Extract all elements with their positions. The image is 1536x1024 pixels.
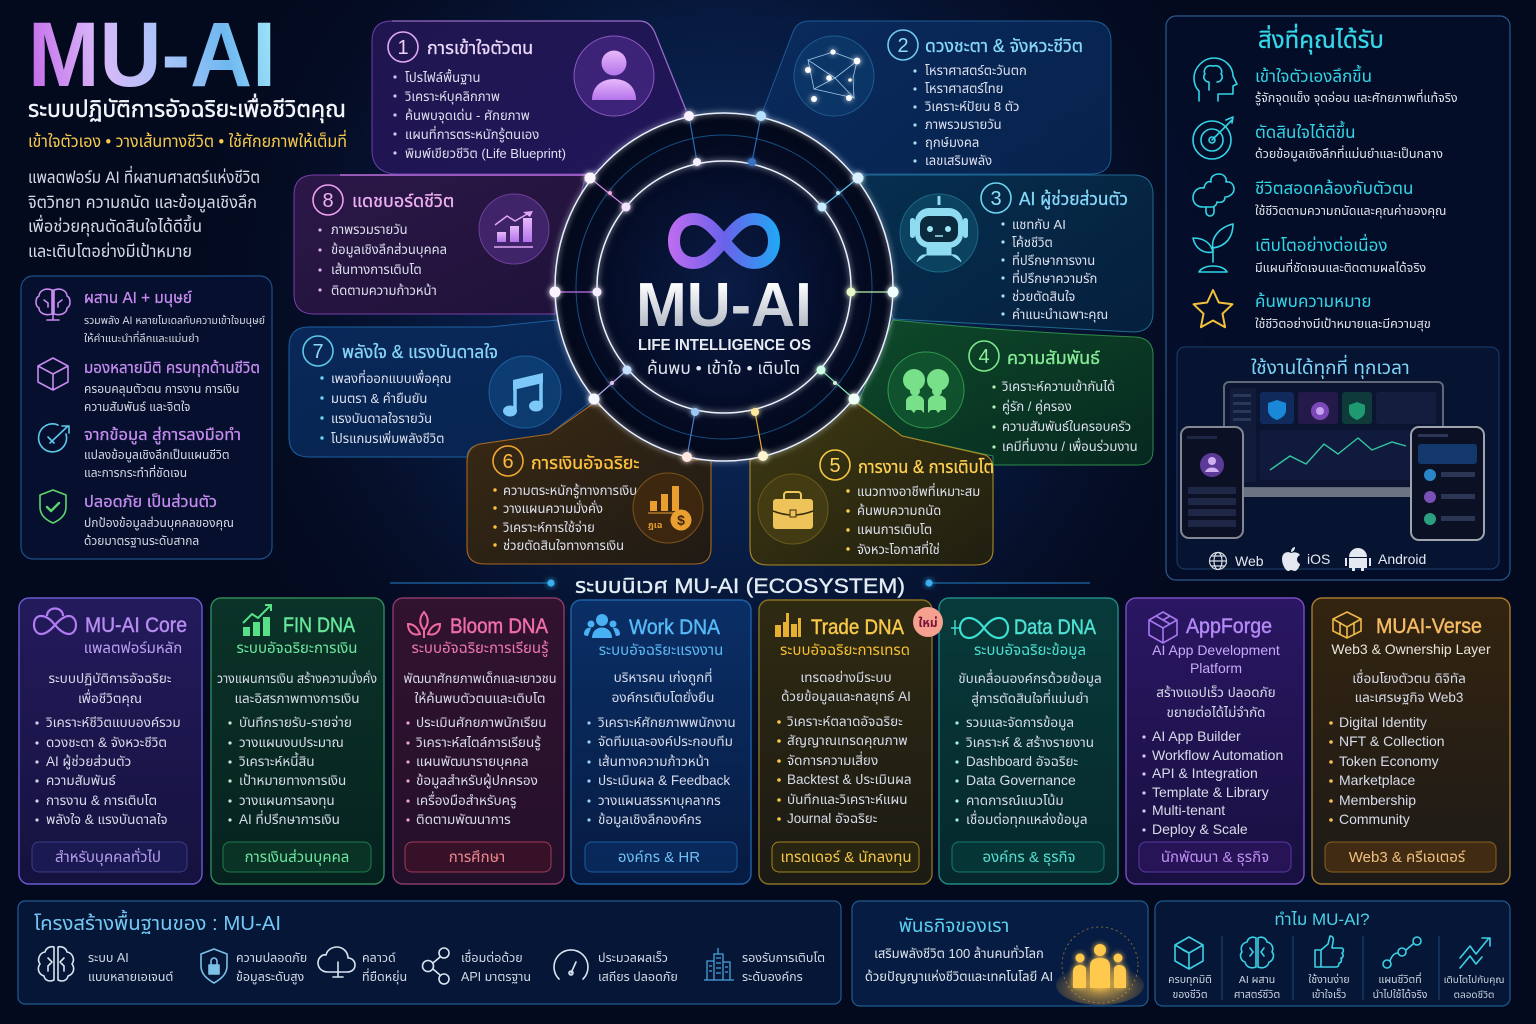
panel 2: destiny and life rhythm: ดวงชะตา & จังหวะชีวิต xyxy=(925,36,1083,56)
card: Trade DNA: จัดการความเสี่ยง xyxy=(787,751,878,768)
card: Data DNA: องค์กร & ธุรกิจ xyxy=(982,849,1076,866)
card: Work DNA: วางแผนสรรหาบุคลากร xyxy=(598,793,721,809)
feature: data to action: จากข้อมูล สู่การลงมือทำ xyxy=(84,426,241,444)
icon: team xyxy=(584,614,620,638)
panel 7: motivation and inspiration xyxy=(289,320,594,457)
card: Trade DNA: วิเคราะห์ตลาดอัจฉริยะ xyxy=(787,714,903,729)
panel: why MU-AI xyxy=(1155,901,1510,1006)
card: FIN DNA xyxy=(211,598,384,884)
icon: app cube xyxy=(1149,612,1177,643)
item: gauge: เสถียร ปลอดภัย xyxy=(598,970,678,984)
intro paragraph: และเติบโตอย่างมีเป้าหมาย xyxy=(28,242,192,261)
feature: secure and private: ปกป้องข้อมูลส่วนบุคคลของคุณ xyxy=(84,516,234,530)
panel 5: career and growth: การงาน & การเติบโต xyxy=(858,457,994,477)
benefit: life alignment: ใช้ชีวิตตามความถนัดและคุณค่าของคุณ xyxy=(1255,204,1446,218)
panel 3: personal AI assistant: โค้ชชีวิต xyxy=(1012,235,1053,250)
intro paragraph: จิตวิทยา ความถนัด และข้อมูลเชิงลึก xyxy=(28,192,257,214)
reason: AI and life science: AI ผสาน xyxy=(1239,974,1275,986)
panel: mission: พันธกิจของเรา xyxy=(899,916,1009,937)
benefit: life alignment: ชีวิตสอดคล้องกับตัวตน xyxy=(1255,178,1413,198)
panel 2: destiny and life rhythm: โหราศาสตร์ตะวันตก xyxy=(925,63,1027,78)
card: FIN DNA: วางแผนการลงทุน xyxy=(239,793,335,809)
card: Work DNA: ระบบอัจฉริยะแรงงาน xyxy=(599,642,723,659)
feature: secure and private xyxy=(40,490,234,548)
feature: AI plus human: รวมพลัง AI หลายโมเดลกับความเข้าใจมนุษย์ xyxy=(84,315,265,327)
panel 1: self understanding: โปรไฟล์พื้นฐาน xyxy=(405,68,480,85)
panel 3: personal AI assistant: AI ผู้ช่วยส่วนตัว xyxy=(1019,189,1128,211)
panel 3: personal AI assistant: ที่ปรึกษาความรัก xyxy=(1012,269,1097,286)
platform: android: Android xyxy=(1378,551,1426,567)
feature: multi-dimensional: ความสัมพันธ์ และจิตใจ xyxy=(84,400,190,414)
item: security: ข้อมูลระดับสูง xyxy=(236,970,305,984)
card: Work DNA: ข้อมูลเชิงลึกองค์กร xyxy=(598,812,702,828)
panel: infrastructure: โครงสร้างพื้นฐานของ : MU-AI xyxy=(34,909,281,935)
card: Work DNA: บริหารคน เก่งถูกที่ xyxy=(614,668,712,686)
item: security xyxy=(201,949,307,984)
platform: web xyxy=(1210,552,1264,570)
reason: all dimensions xyxy=(1168,937,1212,1001)
card: AppForge: สร้างแอปเร็ว ปลอดภัย xyxy=(1156,685,1276,700)
reason: easy to use xyxy=(1308,936,1350,1001)
panel 4: relationships: 4 xyxy=(978,346,990,368)
card: FIN DNA: วิเคราะห์หนี้สิน xyxy=(239,752,315,769)
card: MU-AI Core: AI ผู้ช่วยส่วนตัว xyxy=(46,753,131,770)
item: cloud: คลาวด์ xyxy=(362,951,396,965)
hub subtitle: LIFE INTELLIGENCE OS xyxy=(638,337,811,354)
logo wordmark: MU-AI xyxy=(28,4,276,106)
reason: all dimensions: ของชีวิต xyxy=(1172,989,1208,1001)
card: FIN DNA: FIN DNA xyxy=(283,614,355,637)
feature: AI plus human: ให้คำแนะนำที่ลึกและแม่นยำ xyxy=(84,330,199,345)
card: MU-AI Core xyxy=(19,598,202,884)
item: gauge: ประมวลผลเร็ว xyxy=(598,951,668,965)
card: MUAI-Verse: เชื่อมโยงตัวตน ดิจิทัล xyxy=(1352,669,1466,686)
icon: two people with hearts xyxy=(888,352,964,428)
panel 7: motivation and inspiration: เพลงที่ออกแบบเพื่อคุณ xyxy=(331,369,452,386)
icon: cloud infinity xyxy=(34,608,76,634)
card: MU-AI Core: การงาน & การเติบโต xyxy=(46,793,157,808)
reason: easy to use: เข้าใจเร็ว xyxy=(1312,988,1346,1001)
panel 8: life dashboard: 8 xyxy=(322,190,334,212)
reason: all dimensions: ครบทุกมิติ xyxy=(1168,974,1212,986)
card: Bloom DNA: วิเคราะห์สไตล์การเรียนรู้ xyxy=(416,735,541,751)
panel 7: motivation and inspiration: แรงบันดาลใจรายวัน xyxy=(331,411,432,426)
panel 2: destiny and life rhythm: 2 xyxy=(897,35,909,57)
panel 8: life dashboard: เส้นทางการเติบโต xyxy=(331,262,422,277)
infinity logo xyxy=(674,219,774,263)
panel 8: life dashboard: แดชบอร์ดชีวิต xyxy=(352,191,454,211)
card: Data DNA: เชื่อมต่อทุกแหล่งข้อมูล xyxy=(966,810,1088,828)
card: AppForge: Multi-tenant xyxy=(1152,802,1225,818)
benefit: continuous growth: เติบโตอย่างต่อเนื่อง xyxy=(1255,233,1387,255)
feature: secure and private: ด้วยมาตรฐานระดับสากล xyxy=(84,534,199,548)
panel 2: destiny and life rhythm: ภาพรวมรายวัน xyxy=(925,117,1002,132)
item: enterprise building: ระดับองค์กร xyxy=(742,970,803,984)
icon: coin and bars: $ xyxy=(677,512,685,528)
hub title: MU-AI xyxy=(636,271,812,340)
card: FIN DNA: วางแผนงบประมาณ xyxy=(239,735,344,750)
panel 7: motivation and inspiration: โปรแกมรเพิ่มพลังชีวิต xyxy=(331,430,444,446)
reason: easy to use: ใช้งานง่าย xyxy=(1308,973,1350,986)
card: AppForge: Template & Library xyxy=(1152,784,1269,800)
tagline: เข้าใจตัวเอง • วางเส้นทางชีวิต • ใช้ศักยภาพให้เต็มที่ xyxy=(28,129,347,151)
central hub xyxy=(550,111,898,462)
card: Data DNA: ระบบอัจฉริยะข้อมูล xyxy=(974,642,1086,659)
card: FIN DNA: วางแผนการเงิน สร้างความมั่งคั่ง xyxy=(217,670,377,686)
item: enterprise building: รองรับการเติบโต xyxy=(742,951,825,965)
panel 8: life dashboard: ภาพรวมรายวัน xyxy=(331,222,408,237)
reason: growing with you: เติบโตไปกับคุณ xyxy=(1444,974,1504,986)
card: FIN DNA: เป้าหมายทางการเงิน xyxy=(239,773,346,788)
panel 6: smart finance: วางแผนความมั่งคั่ง xyxy=(503,500,603,516)
feature: data to action: แปลงข้อมูลเชิงลึกเป็นแผนชีวิต xyxy=(84,448,230,462)
card: AppForge: Deploy & Scale xyxy=(1152,821,1248,837)
benefit: better decisions: ด้วยข้อมูลเชิงลึกที่แม่นยำและเป็นกลาง xyxy=(1255,145,1443,161)
panel 1: self understanding: 1 xyxy=(397,37,409,59)
panel: devices: ใช้งานได้ทุกที่ ทุกเวลา xyxy=(1251,354,1410,379)
panel: infrastructure xyxy=(18,901,841,1004)
benefit: know yourself xyxy=(1194,58,1458,105)
card: Bloom DNA: ประเมินศักยภาพนักเรียน xyxy=(416,715,547,730)
reason: practical life plan: นำไปใช้ได้จริง xyxy=(1373,989,1428,1001)
intro paragraph: เพื่อช่วยคุณตัดสินใจได้ดีขึ้น xyxy=(28,214,202,237)
panel 2: destiny and life rhythm xyxy=(761,21,1111,174)
panel 5: career and growth: 5 xyxy=(829,455,841,477)
item: multi-agent AI: แบบหลายเอเจนต์ xyxy=(88,970,173,984)
card: AppForge: AppForge xyxy=(1186,615,1272,638)
reason: AI and life science xyxy=(1234,937,1280,1001)
panel 5: career and growth: ค้นพบความถนัด xyxy=(857,503,941,518)
card: MU-AI Core: วิเคราะห์ชีวิตแบบองค์รวม xyxy=(46,715,181,730)
card: AppForge: AI App Development xyxy=(1152,642,1280,658)
card: Data DNA: คาดการณ์แนวโน้ม xyxy=(966,793,1064,808)
card: MU-AI Core: ความสัมพันธ์ xyxy=(46,773,116,788)
panel: devices xyxy=(1177,347,1499,571)
panel 3: personal AI assistant: ที่ปรึกษาการงาน xyxy=(1012,251,1095,268)
feature: AI plus human: ผสาน AI + มนุษย์ xyxy=(84,290,192,307)
card: MU-AI Core: แพลตฟอร์มหลัก xyxy=(84,640,182,657)
card: AppForge: นักพัฒนา & ธุรกิจ xyxy=(1161,849,1269,866)
reason: practical life plan: แผนชีวิตที่ xyxy=(1378,972,1422,986)
card: AppForge: AI App Builder xyxy=(1152,728,1241,744)
panel: mission xyxy=(852,901,1148,1006)
card: MU-AI Core: MU-AI Core xyxy=(85,614,187,637)
intro paragraph xyxy=(28,165,260,261)
panel 3: personal AI assistant: 3 xyxy=(990,188,1002,210)
card: Data DNA: Dashboard อัจฉริยะ xyxy=(966,754,1078,769)
item: gauge xyxy=(554,950,678,984)
card: Bloom DNA: การศึกษา xyxy=(449,849,505,866)
panel 4: relationships xyxy=(858,320,1153,465)
subtitle: ระบบปฏิบัติการอัจฉริยะเพื่อชีวิตคุณ xyxy=(28,93,346,123)
feature: data to action xyxy=(39,424,241,480)
item: API share: API มาตรฐาน xyxy=(461,970,531,984)
panel 4: relationships: ความสัมพันธ์ในครอบครัว xyxy=(1002,419,1131,434)
panel 7: motivation and inspiration: มนตรา & คำยืนยัน xyxy=(331,391,427,406)
card: Trade DNA: ด้วยข้อมูลและกลยุทธ์ AI xyxy=(781,689,911,705)
platform: iOS: iOS xyxy=(1307,551,1330,567)
panel 5: career and growth xyxy=(750,401,994,565)
icon: constellation xyxy=(794,36,874,116)
card: Bloom DNA: ข้อมูลสำหรับผู้ปกครอง xyxy=(416,773,538,789)
card: MU-AI Core: เพื่อชีวิตคุณ xyxy=(78,689,142,707)
card: MUAI-Verse xyxy=(1312,598,1510,884)
reason: practical life plan xyxy=(1373,937,1428,1001)
benefit: continuous growth: มีแผนที่ชัดเจนและติดตามผลได้จริง xyxy=(1255,259,1426,275)
benefit: continuous growth xyxy=(1193,224,1426,275)
icon: growth chart xyxy=(479,194,549,264)
panel 3: personal AI assistant: แชทกับ AI xyxy=(1012,217,1066,232)
panel 7: motivation and inspiration: 7 xyxy=(312,341,324,363)
item: API share: เชื่อมต่อด้วย xyxy=(461,949,523,965)
panel 1: self understanding: พิมพ์เขียวชีวิต (Life Blueprint) xyxy=(405,146,566,161)
platform: android xyxy=(1345,548,1426,571)
icon: music note xyxy=(489,356,561,428)
panel 8: life dashboard: ข้อมูลเชิงลึกส่วนบุคคล xyxy=(331,242,447,257)
panel 6: smart finance: ความตระหนักรู้ทางการเงิน xyxy=(503,483,637,498)
panel 1: self understanding: ค้นพบจุดเด่น - ศักยภาพ xyxy=(405,108,530,123)
card: Work DNA: ประเมินผล & Feedback xyxy=(598,773,730,788)
panel 1: self understanding: วิเคราะห์บุคลิกภาพ xyxy=(405,89,500,104)
card: MUAI-Verse: Web3 & Ownership Layer xyxy=(1331,641,1491,657)
reason: growing with you xyxy=(1444,938,1504,1001)
benefit: life alignment xyxy=(1193,174,1446,218)
panel 4: relationships: เคมีที่มงาน / เพื่อนร่วมงาน xyxy=(1002,437,1138,454)
panel 3: personal AI assistant xyxy=(858,175,1153,332)
card: Bloom DNA: Bloom DNA xyxy=(450,615,548,638)
icon: person xyxy=(574,36,654,116)
card: Bloom DNA: แผนพัฒนารายบุคคล xyxy=(416,754,529,770)
reason: AI and life science: ศาสตร์ชีวิต xyxy=(1234,989,1280,1001)
card: MU-AI Core: สำหรับบุคคลทั่วไป xyxy=(55,847,161,866)
icon: data infinity xyxy=(951,618,1008,638)
card: MUAI-Verse: Token Economy xyxy=(1339,753,1439,769)
panel 7: motivation and inspiration: พลังใจ & แรงบันดาลใจ xyxy=(342,342,498,362)
benefit: better decisions xyxy=(1193,117,1443,161)
feature: AI plus human xyxy=(36,289,265,345)
right phone mockup xyxy=(1411,427,1484,540)
card: MUAI-Verse: Membership xyxy=(1339,792,1416,808)
card: MUAI-Verse: Marketplace xyxy=(1339,772,1415,788)
card: Bloom DNA xyxy=(393,598,564,884)
hub nodes xyxy=(550,111,898,462)
card: Trade DNA: สัญญาณเทรดคุณภาพ xyxy=(787,733,908,749)
panel 8: life dashboard xyxy=(294,175,586,314)
panel 2: destiny and life rhythm: วิเคราะห์ปัยน 8 ตัว xyxy=(925,99,1019,114)
card: Work DNA: Work DNA xyxy=(629,616,720,639)
card: Data DNA: Data DNA xyxy=(1014,616,1096,639)
card: Data DNA: ขับเคลื่อนองค์กรด้วยข้อมูล xyxy=(958,669,1102,687)
platform: iOS xyxy=(1282,547,1330,571)
panel 5: career and growth: แนวทางอาชีพที่เหมาะสม xyxy=(857,482,980,499)
panel: key features xyxy=(21,276,272,559)
header: title block xyxy=(28,4,347,261)
card: Trade DNA xyxy=(759,600,932,884)
panel 3: personal AI assistant: คำแนะนำเฉพาะคุณ xyxy=(1012,307,1108,322)
benefit: find meaning xyxy=(1194,290,1431,331)
item: enterprise building xyxy=(704,948,825,984)
feature: multi-dimensional: มองหลายมิติ ครบทุกด้านชีวิต xyxy=(84,360,260,377)
feature: multi-dimensional: ครอบคลุมตัวตน การงาน การเงิน xyxy=(84,382,240,396)
card: FIN DNA: ระบบอัจฉริยะการเงิน xyxy=(237,640,357,657)
feature: multi-dimensional xyxy=(38,358,260,414)
panel 5: career and growth: แผนการเติบโต xyxy=(857,522,932,537)
ecosystem heading xyxy=(390,575,1090,598)
card: MUAI-Verse: Community xyxy=(1339,811,1410,827)
icon: coin and bars xyxy=(633,473,703,543)
panel 6: smart finance xyxy=(467,403,711,564)
card: AppForge: Workflow Automation xyxy=(1152,747,1283,763)
card: MUAI-Verse: และเศรษฐกิจ Web3 xyxy=(1355,690,1463,705)
card: Bloom DNA: ติดตามพัฒนาการ xyxy=(416,812,511,827)
feature: data to action: และการกระทำที่ชัดเจน xyxy=(84,464,187,480)
card: Bloom DNA: พัฒนาศักยภาพเด็กและเยาวชน xyxy=(404,671,556,686)
card: FIN DNA: AI ที่ปรึกษาการเงิน xyxy=(239,810,340,827)
benefit: know yourself: เข้าใจตัวเองลึกขึ้น xyxy=(1255,64,1372,86)
card: Data DNA: สู่การตัดสินใจที่แม่นยำ xyxy=(971,689,1089,707)
ecosystem heading: ระบบนิเวศ MU-AI (ECOSYSTEM) xyxy=(575,575,905,598)
panel: mission: ด้วยปัญญาแห่งชีวิตและเทคโนโลยี AI xyxy=(865,969,1053,984)
card: Trade DNA: Backtest & ประเมินผล xyxy=(787,772,912,787)
item: multi-agent AI xyxy=(38,947,173,984)
benefits heading: สิ่งที่คุณได้รับ xyxy=(1258,23,1384,55)
card: AppForge: API & Integration xyxy=(1152,765,1258,781)
card: Data DNA: Data Governance xyxy=(966,772,1076,788)
icon: glowing people xyxy=(1056,927,1144,1005)
benefit: find meaning: ใช้ชีวิตอย่างมีเป้าหมายและมีความสุข xyxy=(1255,317,1431,331)
panel 2: destiny and life rhythm: โหราศาสตร์ไทย xyxy=(925,81,1003,96)
hub rings xyxy=(555,113,893,461)
left phone mockup xyxy=(1181,427,1243,538)
panel 6: smart finance: วิเคราะห์การใช้จ่าย xyxy=(503,520,595,535)
panel 4: relationships: ความสัมพันธ์ xyxy=(1007,348,1100,368)
hub connectors xyxy=(555,116,893,457)
item: cloud xyxy=(318,947,407,984)
card: Bloom DNA: เครื่องมือสำหรับครู xyxy=(416,791,517,809)
card: MUAI-Verse: NFT & Collection xyxy=(1339,733,1445,749)
card: AppForge: ขยายต่อได้ไม่จำกัด xyxy=(1166,704,1266,720)
card: MU-AI Core: พลังใจ & แรงบันดาลใจ xyxy=(46,812,168,827)
panel 5: career and growth: จังหวะโอกาสที่ใช่ xyxy=(857,540,940,557)
card: Trade DNA: เทรดอย่างมีระบบ xyxy=(800,669,892,685)
reason: growing with you: ตลอดชีวิต xyxy=(1454,989,1494,1001)
card: Work DNA: องค์กรเติบโตยั่งยืน xyxy=(612,689,714,705)
icon: coin and bars: ฎเฉ xyxy=(648,520,662,530)
card: Data DNA: วิเคราะห์ & สร้างรายงาน xyxy=(966,735,1094,750)
card: Trade DNA: ระบบอัจฉริยะการเทรด xyxy=(780,642,910,659)
icon: briefcase xyxy=(758,474,828,544)
icon: lotus leaves xyxy=(408,612,440,638)
card: Work DNA: องค์กร & HR xyxy=(618,849,700,866)
card: FIN DNA: บันทึกรายรับ-รายจ่าย xyxy=(239,714,352,730)
card: AppForge xyxy=(1126,598,1304,884)
item: API share xyxy=(422,948,531,984)
panel 6: smart finance: 6 xyxy=(502,451,514,473)
card: Bloom DNA: ระบบอัจฉริยะการเรียนรู้ xyxy=(412,640,549,657)
item: cloud: ที่ยืดหยุ่น xyxy=(362,968,407,984)
icon: robot xyxy=(900,194,978,272)
card: Trade DNA: Trade DNA xyxy=(811,616,904,639)
icon: verse hexagon xyxy=(1333,612,1361,638)
panel 6: smart finance: การเงินอัจฉริยะ xyxy=(531,453,640,473)
benefit: better decisions: ตัดสินใจได้ดีขึ้น xyxy=(1255,120,1356,142)
panel 1: self understanding xyxy=(372,21,688,174)
panel: mission: เสริมพลังชีวิต 100 ล้านคนทั่วโลก xyxy=(874,945,1044,961)
icon: trading bars xyxy=(775,613,801,637)
panel 1: self understanding: การเข้าใจตัวตน xyxy=(427,38,533,58)
panel 2: destiny and life rhythm: เลขเสริมพลัง xyxy=(925,153,992,168)
badge: new: ใหม่ xyxy=(918,616,938,630)
panel 3: personal AI assistant: ช่วยตัดสินใจ xyxy=(1012,289,1075,304)
item: security: ความปลอดภัย xyxy=(236,951,307,965)
card: Work DNA: เส้นทางความก้าวหน้า xyxy=(598,754,709,769)
card: MU-AI Core: ระบบปฏิบัติการอัจฉริยะ xyxy=(49,671,172,686)
card: Bloom DNA: ให้ค้นพบตัวตนและเติบโต xyxy=(414,691,546,706)
panel 1: self understanding: แผนที่การตระหนักรู้ตนเอง xyxy=(405,125,539,142)
badge: new xyxy=(913,607,943,637)
panel 4: relationships: คู่รัก / คู่ครอง xyxy=(1002,399,1072,414)
panel 6: smart finance: ช่วยตัดสินใจทางการเงิน xyxy=(503,538,624,553)
benefit: find meaning: ค้นพบความหมาย xyxy=(1255,291,1372,311)
laptop mockup xyxy=(1204,382,1464,497)
card: FIN DNA: การเงินส่วนบุคคล xyxy=(245,848,349,866)
hub tagline: ค้นพบ • เข้าใจ • เติบโต xyxy=(647,360,800,378)
card: FIN DNA: และอิสรภาพทางการเงิน xyxy=(235,691,359,706)
benefit: know yourself: รู้จักจุดแข็ง จุดอ่อน และศักยภาพที่แท้จริง xyxy=(1255,89,1458,105)
panel 2: destiny and life rhythm: ฤกษ์มงคล xyxy=(925,135,979,150)
panel: why MU-AI: ทำไม MU-AI? xyxy=(1274,910,1370,929)
card: AppForge: Platform xyxy=(1190,660,1242,676)
card: MUAI-Verse: Web3 & ครีเอเตอร์ xyxy=(1349,849,1466,866)
card: Work DNA: วิเคราะห์ศักยภาพพนักงาน xyxy=(598,715,736,730)
card: Work DNA xyxy=(571,600,751,884)
platform: web: Web xyxy=(1235,553,1264,569)
feature: secure and private: ปลอดภัย เป็นส่วนตัว xyxy=(84,493,217,511)
intro paragraph: แพลตฟอร์ม AI ที่ผสานศาสตร์แห่งชีวิต xyxy=(28,165,260,187)
item: multi-agent AI: ระบบ AI xyxy=(88,951,129,965)
panel 4: relationships: วิเคราะห์ความเข้ากันได้ xyxy=(1002,379,1115,394)
platform labels xyxy=(1210,547,1426,571)
panel 8: life dashboard: ติดตามความก้าวหน้า xyxy=(331,283,437,298)
card: Data DNA xyxy=(939,598,1118,884)
panel: benefits xyxy=(1166,16,1510,580)
card: MU-AI Core: ดวงชะตา & จังหวะชีวิต xyxy=(46,735,167,750)
card: MUAI-Verse: Digital Identity xyxy=(1339,714,1427,730)
icon: growth bars xyxy=(243,605,271,636)
card: MUAI-Verse: MUAI-Verse xyxy=(1376,615,1482,638)
card: Work DNA: จัดทีมและองค์ประกอบทีม xyxy=(598,734,733,749)
card: Trade DNA: บันทึกและวิเคราะห์แผน xyxy=(787,792,908,807)
card: Trade DNA: Journal อัจฉริยะ xyxy=(787,811,878,826)
card: Data DNA: รวมและจัดการข้อมูล xyxy=(966,715,1074,731)
card: Trade DNA: เทรดเดอร์ & นักลงทุน xyxy=(780,849,912,866)
